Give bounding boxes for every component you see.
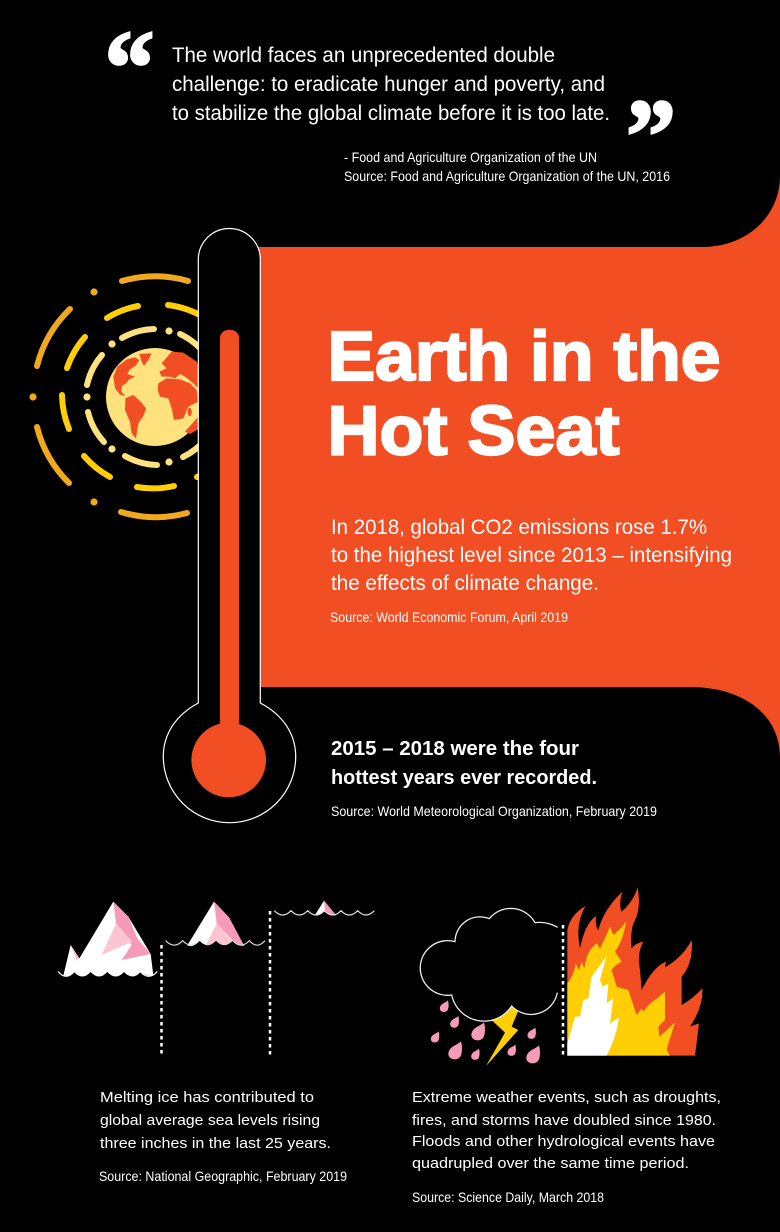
icon: closing quotation mark: ” [626,77,676,194]
rain drops [431,1000,540,1063]
text block: extreme weather: Extreme weather events, such as droughts, [412,1089,721,1106]
quote attribution: - Food and Agriculture Organization of the UN [344,149,597,165]
small iceberg [274,901,374,915]
globe [106,348,204,446]
thermometer outline [163,229,296,823]
text block: extreme weather: Floods and other hydrological events have [412,1133,715,1150]
text block: CO2 emissions [331,516,732,595]
outer heat ring [29,276,188,517]
lightning bolt [486,1004,520,1066]
icon: melting icebergs [58,901,374,976]
source: Science Daily: Source: Science Daily, March 2018 [412,1189,604,1205]
text block: hottest years: hottest years ever recorded. [331,767,597,789]
medium iceberg [166,902,265,946]
source: National Geographic: Source: National Geographic, February 2019 [99,1168,347,1184]
mercury bulb [191,723,266,797]
text block: CO2 emissions: In 2018, global CO2 emissions rose 1.7% [331,516,707,539]
outer flame [567,887,702,1056]
text block: extreme weather: quadrupled over the same time period. [412,1155,689,1172]
quote attribution [344,149,670,184]
inner heat ring [83,327,205,466]
text block: CO2 emissions: to the highest level since 2013 – intensifying [331,544,732,567]
thermometer [163,229,296,823]
dotted sea level lines [162,911,270,1056]
quote text [172,44,610,125]
quote block [104,8,676,194]
quote text: to stabilize the global climate before it is too late. [172,102,610,125]
cloud [420,908,558,1021]
mercury column [220,330,239,750]
title: Earth in the [328,317,720,395]
icon: storm cloud with rain and lightning [420,908,558,1066]
source: World Meteorological Organization: Source: World Meteorological Organization, February 2019 [331,803,657,819]
orange panel [250,176,780,758]
icon: earth with radiating heat rings [29,276,210,517]
middle flame [567,922,675,1056]
text block: melting ice: Melting ice has contributed to [100,1089,314,1106]
title: Hot Seat [328,391,620,469]
quote text: The world faces an unprecedented double [172,44,555,67]
text block: melting ice [100,1089,331,1152]
text block: extreme weather [412,1089,721,1172]
icon: opening quotation mark: “ [104,8,154,125]
quote attribution: Source: Food and Agriculture Organization of the UN, 2016 [344,168,670,184]
quote text: challenge: to eradicate hunger and poverty, and [172,73,605,96]
text block: melting ice: global average sea levels rising [100,1112,320,1129]
middle heat ring [62,305,210,488]
icon: fire [567,887,702,1056]
text block: CO2 emissions: the effects of climate change. [331,572,599,595]
inner flame [567,956,619,1056]
title [328,317,720,469]
text block: extreme weather: fires, and storms have doubled since 1980. [412,1112,716,1129]
source: World Economic Forum: Source: World Economic Forum, April 2019 [330,609,568,625]
text block: hottest years: 2015 – 2018 were the four [331,738,579,760]
large iceberg [58,902,157,976]
text block: melting ice: three inches in the last 25 years. [100,1135,331,1152]
text block: hottest years [331,738,597,789]
dotted divider between cloud and fire [562,925,564,1056]
